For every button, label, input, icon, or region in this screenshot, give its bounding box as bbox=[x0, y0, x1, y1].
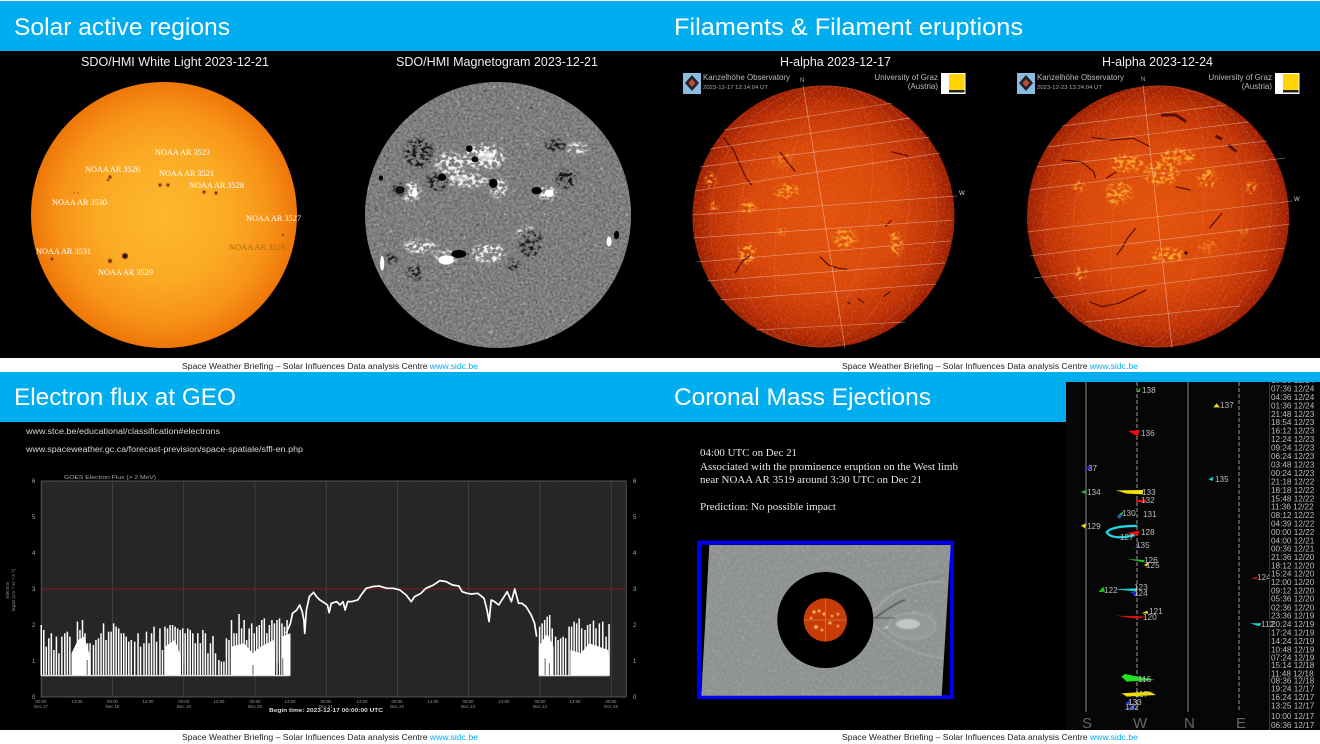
header: Solar active regions: Solar active regions bbox=[14, 14, 230, 41]
CME traces bbox=[1081, 388, 1262, 709]
CME index numbers: 125 bbox=[1146, 561, 1160, 570]
flux data bbox=[41, 581, 609, 676]
header: Coronal Mass Ejections bbox=[660, 372, 1320, 422]
x axis labels: 00:00 bbox=[462, 699, 474, 704]
header: Filaments & Filament eruptions bbox=[660, 1, 1320, 51]
time list: 18:12 12/20 bbox=[1271, 561, 1315, 570]
CME index numbers: 127 bbox=[1120, 533, 1134, 542]
time list bbox=[1270, 376, 1315, 730]
x axis labels: 00:00 bbox=[250, 699, 261, 704]
left axis ticks: 6 bbox=[32, 479, 36, 485]
CME index numbers: 124 bbox=[1134, 589, 1148, 598]
footer: briefing credit: Space Weather Briefing – Solar Influences Data analysis Centre www.sidc.be bbox=[842, 361, 1138, 371]
footer: briefing credit: Space Weather Briefing – Solar Influences Data analysis Centre www.sidc.be bbox=[842, 732, 1138, 742]
CME index numbers: 116 bbox=[1138, 675, 1151, 684]
y axis label bbox=[5, 568, 16, 611]
CME description: Associated with the prominence eruption on the West limb bbox=[700, 462, 958, 473]
right axis ticks: 3 bbox=[633, 587, 637, 593]
label: W: W bbox=[1294, 197, 1300, 203]
image: white light sun with labelled active regions: NOAA AR 3528 bbox=[189, 180, 244, 190]
heading: H-alpha 24 Dec: H-alpha 2023-12-24 bbox=[1102, 55, 1213, 69]
time list: 07:36 12/24 bbox=[1271, 384, 1315, 394]
CME index numbers: 135 bbox=[1215, 475, 1229, 484]
image: white light sun with labelled active regions: NOAA AR 3529 bbox=[98, 267, 153, 277]
university caption: University of Graz bbox=[874, 73, 938, 82]
x axis labels: 12:00 bbox=[214, 699, 225, 704]
CME description: 04:00 UTC on Dec 21 bbox=[700, 448, 797, 459]
CME index numbers: 37 bbox=[1088, 464, 1098, 473]
right axis ticks bbox=[633, 479, 637, 701]
university caption bbox=[1208, 73, 1272, 91]
x axis labels: Dec 18 bbox=[106, 704, 120, 709]
heliographic grid bbox=[1027, 73, 1292, 360]
time list: 20:24 12/19 bbox=[1271, 620, 1315, 629]
CME description: Prediction: No possible impact bbox=[700, 502, 836, 513]
x axis labels: 12:00 bbox=[356, 699, 368, 704]
left axis ticks: 2 bbox=[32, 623, 36, 629]
CME index numbers: 124 bbox=[1257, 573, 1271, 582]
CME index numbers bbox=[1087, 386, 1274, 712]
occulting disk bbox=[777, 572, 873, 668]
university caption bbox=[874, 73, 938, 91]
panel: solar active regions bbox=[0, 1, 660, 371]
left axis ticks: 4 bbox=[32, 551, 36, 557]
x axis labels: Dec 20 bbox=[248, 704, 263, 709]
image: white light sun with labelled active regions: NOAA AR 3523 bbox=[155, 147, 210, 157]
line chart: GOES electron flux bbox=[5, 475, 637, 714]
time list: 03:48 12/23 bbox=[1271, 461, 1315, 470]
compass labels: S bbox=[1082, 715, 1092, 732]
reference links: www.spaceweather.gc.ca/forecast-prevision/space-spatiale/sffl-en.php bbox=[25, 445, 304, 454]
CME timeline strip bbox=[1066, 376, 1320, 732]
time list: 18:18 12/22 bbox=[1271, 486, 1315, 495]
CME index numbers: 128 bbox=[1141, 528, 1155, 537]
CME index numbers: 138 bbox=[1142, 386, 1156, 395]
sunspots bbox=[51, 175, 284, 263]
image: white light sun with labelled active regions: NOAA AR 3521 bbox=[159, 168, 214, 178]
university caption: University of Graz bbox=[1208, 73, 1272, 82]
x axis labels: Dec 21 bbox=[319, 704, 334, 709]
image: white light sun with labelled active regions: NOAA AR 3530 bbox=[52, 197, 107, 207]
image: magnetogram sun bbox=[365, 82, 631, 348]
time list: 21:48 12/23 bbox=[1271, 410, 1315, 419]
left axis ticks: 0 bbox=[32, 695, 36, 701]
begin time caption: Begin time: 2023-12-17 00:00:00 UTC bbox=[269, 708, 383, 714]
CME index numbers: 134 bbox=[1087, 488, 1101, 497]
x axis labels: 00:00 bbox=[534, 699, 546, 704]
x axis labels: Dec 17 bbox=[34, 704, 49, 709]
x axis labels: 12:00 bbox=[428, 699, 439, 704]
CME index numbers: 112 bbox=[1261, 620, 1274, 629]
time list: 04:00 12/21 bbox=[1271, 536, 1315, 545]
time list: 15:48 12/22 bbox=[1271, 494, 1315, 503]
CME index numbers: 133 bbox=[1128, 698, 1142, 707]
left axis ticks: 5 bbox=[32, 515, 36, 521]
image: white light sun with labelled active regions: NOAA AR 3527 bbox=[246, 213, 302, 223]
dark filaments bbox=[723, 137, 908, 304]
CME index numbers: 120 bbox=[1143, 613, 1157, 622]
right axis ticks: 6 bbox=[633, 479, 637, 485]
observatory caption: Kanzelhöhe Observatory bbox=[1037, 73, 1124, 82]
CME index numbers: 130 bbox=[1122, 509, 1136, 518]
CME index numbers: 129 bbox=[1087, 522, 1101, 531]
time list: 16:24 12/17 bbox=[1271, 693, 1315, 702]
logo: Uni Graz bbox=[941, 73, 966, 94]
compass labels: E bbox=[1236, 715, 1246, 732]
time list: 15:14 12/18 bbox=[1271, 661, 1315, 670]
x axis labels bbox=[34, 699, 619, 709]
time list: 10:00 12/17 bbox=[1271, 712, 1315, 721]
left axis ticks: 3 bbox=[32, 587, 36, 593]
x axis labels: 12:00 bbox=[498, 699, 510, 704]
time list: 16:12 12/23 bbox=[1271, 427, 1315, 436]
time list: 00:36 12/21 bbox=[1271, 545, 1315, 554]
heading: H-alpha 17 Dec: H-alpha 2023-12-17 bbox=[780, 55, 891, 69]
image: white light sun with labelled active regions: NOAA AR 3531 bbox=[36, 246, 91, 256]
time list: 23:36 12/19 bbox=[1271, 612, 1315, 621]
x axis labels: Dec 25 bbox=[604, 704, 619, 709]
time list: 19:24 12/17 bbox=[1271, 685, 1315, 694]
x axis labels: 00:00 bbox=[36, 699, 47, 704]
heliographic grid bbox=[692, 85, 957, 348]
time list: 21:36 12/20 bbox=[1271, 553, 1315, 562]
panel: coronal mass ejections bbox=[660, 372, 1320, 742]
x axis labels: 00:00 bbox=[606, 699, 617, 704]
position angle guide lines bbox=[1086, 382, 1239, 712]
observatory caption: Kanzelhöhe Observatory bbox=[703, 73, 790, 82]
CME description bbox=[700, 448, 958, 513]
right axis ticks: 5 bbox=[633, 515, 637, 521]
image: white light sun with labelled active regions: NOAA AR 3519 bbox=[229, 242, 285, 252]
observatory caption bbox=[703, 73, 790, 91]
time list: 02:36 12/20 bbox=[1271, 603, 1315, 612]
time list: 14:24 12/19 bbox=[1271, 637, 1315, 646]
footer: briefing credit: Space Weather Briefing – Solar Influences Data analysis Centre www.sidc.be bbox=[182, 732, 478, 742]
header: Solar active regions bbox=[0, 1, 660, 51]
compass labels: N bbox=[1184, 715, 1195, 732]
panel: electron flux at GEO bbox=[0, 372, 660, 742]
sunspot bbox=[1184, 251, 1188, 255]
observatory caption: 2023-12-23 13:24:04 UT bbox=[1037, 85, 1103, 91]
compass labels: W bbox=[1133, 715, 1148, 732]
magnetogram black flux bbox=[386, 138, 578, 281]
time list: 09:12 12/20 bbox=[1271, 586, 1315, 595]
CME index numbers: 122 bbox=[1104, 586, 1118, 595]
CME index numbers: 121 bbox=[1149, 607, 1163, 616]
magnetogram sunspot cores bbox=[379, 145, 619, 271]
x axis labels: 00:00 bbox=[107, 699, 119, 704]
CME index numbers: 132 bbox=[1141, 496, 1155, 505]
CME index numbers: 117 bbox=[1135, 690, 1148, 699]
label: N: N bbox=[800, 78, 804, 84]
time list: 06:24 12/23 bbox=[1271, 452, 1315, 461]
chart title: GOES Electron Flux (> 2 MeV) bbox=[64, 475, 156, 481]
observatory caption: 2023-12-17 12:14:04 UT bbox=[703, 85, 769, 91]
reference links bbox=[25, 427, 304, 454]
logo: Uni Graz bbox=[1275, 73, 1300, 94]
x axis labels: 12:00 bbox=[72, 699, 83, 704]
time list: 21:18 12/22 bbox=[1271, 477, 1315, 486]
CME plume bbox=[873, 575, 945, 658]
x axis labels: 12:00 bbox=[570, 699, 581, 704]
x axis labels: Dec 23 bbox=[461, 704, 476, 709]
bright plage regions bbox=[1073, 148, 1257, 280]
time list: 13:25 12/17 bbox=[1271, 702, 1315, 711]
time list: 07:24 12/19 bbox=[1271, 654, 1315, 663]
image: white light sun with labelled active regions: NOAA AR 3526 bbox=[85, 164, 141, 174]
time list: 01:36 12/24 bbox=[1271, 402, 1315, 410]
university caption: (Austria) bbox=[908, 82, 938, 91]
threshold line bbox=[41, 588, 626, 590]
x axis labels: 12:00 bbox=[142, 699, 154, 704]
university caption: (Austria) bbox=[1242, 82, 1272, 91]
label: N: N bbox=[1141, 77, 1145, 83]
time list: 08:36 12/18 bbox=[1271, 676, 1315, 685]
observatory caption bbox=[1037, 73, 1124, 91]
x axis labels: 12:00 bbox=[284, 699, 296, 704]
x axis labels: Dec 19 bbox=[177, 704, 191, 709]
time list: 10:36 12/24 bbox=[1271, 376, 1315, 385]
time list: 05:36 12/20 bbox=[1271, 595, 1315, 604]
logo: Kanzelhöhe bbox=[683, 73, 701, 94]
right axis ticks: 2 bbox=[633, 623, 637, 629]
image: coronagraph with blue frame bbox=[699, 543, 952, 697]
header: Coronal Mass Ejections: Coronal Mass Ejections bbox=[674, 384, 931, 411]
y axis label: Electron bbox=[5, 581, 10, 598]
CME index numbers: 123 bbox=[1134, 583, 1148, 592]
heading: white light: SDO/HMI White Light 2023-12-21 bbox=[81, 55, 269, 69]
x axis labels: Dec 24 bbox=[533, 704, 548, 709]
header: Electron flux at GEO bbox=[0, 372, 660, 422]
reference links: www.stce.be/educational/classification#electrons bbox=[25, 427, 220, 436]
x axis labels: 00:00 bbox=[320, 699, 332, 704]
CME index numbers: 126 bbox=[1144, 556, 1158, 565]
right axis ticks: 0 bbox=[633, 695, 637, 701]
time list: 18:54 12/23 bbox=[1271, 418, 1315, 427]
inset H-alpha sun bbox=[804, 598, 847, 642]
logo: Kanzelhöhe bbox=[1017, 73, 1035, 94]
time list: 17:24 12/19 bbox=[1271, 629, 1315, 638]
x axis labels: 00:00 bbox=[178, 699, 190, 704]
left axis ticks bbox=[32, 479, 36, 701]
time list: 11:48 12/18 bbox=[1271, 670, 1314, 679]
header: Filaments & Filament eruptions: Filaments & Filament eruptions bbox=[674, 14, 1023, 41]
right axis ticks: 1 bbox=[633, 659, 637, 665]
time list: 10:48 12/19 bbox=[1271, 645, 1315, 654]
CME index numbers: 135 bbox=[1136, 541, 1150, 550]
right axis ticks: 4 bbox=[633, 551, 637, 557]
time list: 00:00 12/22 bbox=[1271, 528, 1315, 537]
header: Electron flux at GEO: Electron flux at GEO bbox=[14, 384, 236, 411]
time list: 11:36 12/22 bbox=[1271, 503, 1314, 512]
time list: 04:36 12/24 bbox=[1271, 393, 1315, 402]
heading: magnetogram: SDO/HMI Magnetogram 2023-12-21 bbox=[396, 55, 598, 69]
CME description: near NOAA AR 3519 around 3:30 UTC on Dec 21 bbox=[700, 475, 922, 486]
bright plage regions bbox=[705, 152, 902, 264]
x axis labels: Dec 22 bbox=[390, 704, 405, 709]
image: white light sun with labelled active regions bbox=[31, 82, 302, 348]
time list: 12:00 12/20 bbox=[1271, 578, 1315, 587]
time list: 08:12 12/22 bbox=[1271, 511, 1315, 520]
time list: 04:39 12/22 bbox=[1271, 519, 1315, 528]
y axis label: log10 (cm⁻² sr⁻¹ s⁻¹) bbox=[11, 568, 16, 611]
label: W: W bbox=[959, 191, 965, 197]
time list: 06:36 12/17 bbox=[1271, 721, 1315, 730]
CME index numbers: 133 bbox=[1142, 488, 1156, 497]
CME index numbers: 131 bbox=[1143, 510, 1157, 519]
dark filaments bbox=[1062, 115, 1237, 307]
image: H-alpha sun 24 Dec bbox=[842, 73, 1300, 371]
left axis ticks: 1 bbox=[32, 659, 36, 665]
time list: 00:24 12/23 bbox=[1271, 469, 1315, 478]
compass labels bbox=[1082, 715, 1246, 732]
CME index numbers: 137 bbox=[1220, 401, 1234, 410]
CME index numbers: 132 bbox=[1125, 703, 1139, 712]
x axis labels: 00:00 bbox=[392, 699, 403, 704]
magnetogram white flux bbox=[400, 142, 587, 263]
time list: 15:24 12/20 bbox=[1271, 570, 1315, 579]
CME index numbers: 136 bbox=[1141, 429, 1155, 438]
footer: briefing credit: Space Weather Briefing – Solar Influences Data analysis Centre www.sidc.be bbox=[182, 361, 478, 371]
time list: 09:24 12/23 bbox=[1271, 444, 1315, 453]
time list: 12:24 12/23 bbox=[1271, 435, 1315, 444]
